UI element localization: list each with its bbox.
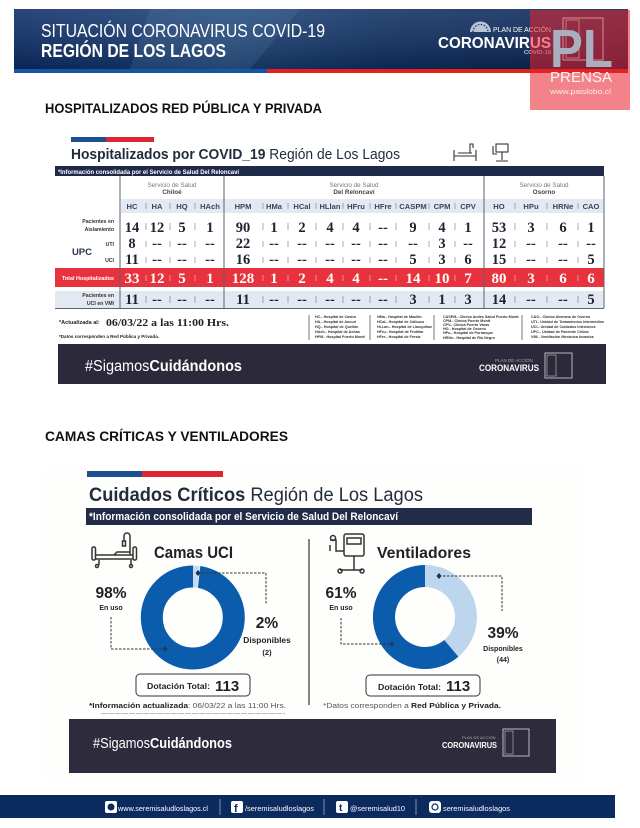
header title: SITUACIÓN CORONAVIRUS COVID-19 — [41, 20, 325, 41]
row: aislamiento: 1 — [270, 220, 278, 236]
box: dotación total ventiladores: 113 — [446, 678, 470, 695]
row: aislamiento: 14 — [125, 220, 139, 236]
label: 61% en uso: En uso — [329, 605, 353, 612]
row: total hospitalizados: 6 — [559, 271, 567, 287]
row: aislamiento: 12 — [150, 220, 164, 236]
panel: hospitalizados table: Pacientes en — [82, 293, 114, 299]
abbreviations legend: CPM.- Clínica Puerto Montt — [443, 319, 491, 323]
row: total hospitalizados: 1 — [206, 271, 214, 287]
watermark: PL prensa — [530, 10, 630, 110]
update note: 06/03/22 a las 11:00 Hrs. — [106, 317, 229, 329]
code row: HCal — [293, 202, 311, 211]
row: UCI: 16 — [236, 252, 250, 268]
watermark: PL prensa: PRENSA — [550, 69, 612, 86]
row: total hospitalizados: 1 — [270, 271, 278, 287]
row: UTI: -- — [408, 236, 418, 252]
row: total hospitalizados: 4 — [352, 271, 360, 287]
row: total hospitalizados: Total Hospitalizados — [62, 276, 114, 282]
service headings: Del Reloncaví — [333, 189, 375, 196]
row: aislamiento: 5 — [178, 220, 186, 236]
row: aislamiento: 90 — [236, 220, 250, 236]
row: aislamiento: 2 — [298, 220, 306, 236]
row: UCI: -- — [526, 252, 536, 268]
row: UTI: -- — [526, 236, 536, 252]
row: UTI: -- — [378, 236, 388, 252]
banner: sigamos cuidándonos: PLAN DE ACCIÓN — [495, 357, 533, 363]
panel: hospitalizados table: UCI en VMI — [87, 301, 115, 307]
table title: Hospitalizados por COVID_19 Región de Los Lagos — [71, 147, 400, 163]
row: pacientes en VMI: 11 — [125, 292, 139, 308]
row: pacientes en VMI: 5 — [587, 292, 595, 308]
panel: hospitalizados table — [55, 137, 606, 384]
row: pacientes en VMI: -- — [351, 292, 361, 308]
row: aislamiento: 1 — [206, 220, 214, 236]
abbreviations legend: VMI.- Ventilación Mecánica Invasiva — [531, 335, 594, 339]
logo: plan de acción coronavirus: PLAN DE ACCIÓN — [493, 25, 551, 34]
code row: HA — [152, 202, 163, 211]
panel: cuidados críticos — [45, 468, 585, 780]
panel title: Cuidados Críticos Región de Los Lagos — [89, 484, 423, 506]
footer: instagram — [429, 801, 510, 813]
code row: HQ — [176, 202, 188, 211]
row: pacientes en VMI: -- — [297, 292, 307, 308]
banner: sigamos cuidándonos 2 — [69, 719, 556, 773]
heading: camas UCI: Camas UCI — [154, 544, 233, 562]
info bar — [86, 508, 532, 525]
footer: facebook — [231, 801, 314, 815]
row: aislamiento: 4 — [438, 220, 446, 236]
info bar: *Información consolidada por el Servicio de Salud Del Reloncaví — [58, 170, 239, 176]
row: total hospitalizados: 128 — [232, 271, 254, 287]
abbreviations legend: HO.- Hospital de Osorno — [443, 327, 487, 331]
label: 39% disponibles: (44) — [497, 657, 509, 664]
label: 98% en uso: En uso — [99, 605, 123, 612]
row: total hospitalizados: 5 — [178, 271, 186, 287]
code row — [121, 199, 603, 213]
box: dotación total camas: Dotación Total: — [147, 681, 210, 691]
row: UCI: -- — [297, 252, 307, 268]
row labels: Aislamiento — [85, 227, 114, 233]
row: UTI: 3 — [438, 236, 446, 252]
abbreviations legend — [309, 315, 604, 340]
row: UCI: 11 — [125, 252, 139, 268]
label: 39% disponibles: 39% — [487, 625, 519, 642]
code row: HAch — [200, 202, 220, 211]
update note: *Actualizada al: — [59, 320, 100, 326]
row: UCI: -- — [205, 252, 215, 268]
row: UCI: 6 — [464, 252, 472, 268]
row: UTI: -- — [205, 236, 215, 252]
row: UTI: -- — [351, 236, 361, 252]
donut chart: ventiladores — [373, 565, 477, 669]
row: pacientes en VMI: 3 — [409, 292, 417, 308]
row: aislamiento: 6 — [559, 220, 567, 236]
service headings: Osorno — [533, 189, 555, 196]
logo: plan de acción coronavirus — [438, 22, 551, 56]
row: UTI: -- — [558, 236, 568, 252]
banner: sigamos cuidándonos 2: CORONAVIRUS — [442, 741, 498, 750]
service headings: Servicio de Salud — [519, 182, 569, 189]
row: pacientes en VMI: -- — [325, 292, 335, 308]
abbreviations legend: HRNe.- Hospital de Río Negro — [443, 336, 496, 340]
row: aislamiento: 1 — [464, 220, 472, 236]
row: UTI: -- — [152, 236, 162, 252]
abbreviations legend: UCI.- Unidad de Cuidados Intensivos — [531, 325, 596, 329]
row: aislamiento: 1 — [587, 220, 595, 236]
row: UTI: 8 — [128, 236, 136, 252]
row: UCI: -- — [177, 252, 187, 268]
note: actualización: *Información actualizada : 06/03/22 a las 11:00 Hrs. — [89, 703, 286, 710]
abbreviations legend: CAO.- Clínica Alemana de Osorno — [531, 315, 591, 319]
service headings: Chiloé — [162, 189, 182, 196]
logo: plan de acción coronavirus: CORONAVIRUS — [438, 35, 551, 52]
label: 98% en uso — [95, 585, 127, 612]
label: 61% en uso — [325, 585, 357, 612]
header title — [41, 20, 325, 61]
code row: HFru — [347, 202, 365, 211]
code row: HLlan — [319, 202, 341, 211]
row: pacientes en VMI: 11 — [236, 292, 250, 308]
row: total hospitalizados — [55, 268, 604, 287]
footer: twitter: @seremisalud10 — [350, 804, 405, 813]
row: aislamiento: 4 — [352, 220, 360, 236]
note: datos: *Datos corresponden a Red Pública y Privada. — [323, 703, 501, 710]
row: UTI: -- — [586, 236, 596, 252]
label: 39% disponibles — [483, 625, 523, 664]
row: total hospitalizados: 10 — [434, 271, 450, 287]
row labels: UCI — [105, 258, 115, 264]
row: aislamiento: 3 — [527, 220, 535, 236]
abbreviations legend: HFre.- Hospital de Fresia — [377, 335, 421, 339]
abbreviations legend: CASPM.- Clínica Andes Salud Puerto Montt — [443, 315, 519, 319]
row labels: Pacientes en — [82, 219, 114, 225]
code row: CPV — [460, 202, 477, 211]
code row: HPM — [235, 202, 251, 211]
code row: CPM — [434, 202, 450, 211]
footer: twitter — [336, 801, 405, 814]
abbreviations legend: UTI.- Unidad de Tratamientos Intermedios — [531, 320, 604, 324]
row: pacientes en VMI — [55, 291, 604, 308]
footer: twitter: t — [339, 803, 343, 814]
row: UCI: 3 — [438, 252, 446, 268]
row: UTI: -- — [177, 236, 187, 252]
row: UCI: 5 — [587, 252, 595, 268]
row: UTI: -- — [297, 236, 307, 252]
row: UTI: -- — [463, 236, 473, 252]
header banner — [14, 9, 628, 73]
footer bar — [0, 795, 615, 818]
row: total hospitalizados: 6 — [587, 271, 595, 287]
abbreviations legend: HAch.- Hospital de Achao — [315, 330, 361, 334]
abbreviations legend: HQ.- Hospital de Quellón — [315, 325, 359, 329]
box: dotación total ventiladores: Dotación Total: — [378, 682, 441, 692]
box: dotación total camas: 113 — [215, 678, 239, 695]
row: UCI: -- — [325, 252, 335, 268]
row: pacientes en VMI: -- — [152, 292, 162, 308]
row: pacientes en VMI: -- — [558, 292, 568, 308]
service headings — [147, 182, 569, 196]
code row: HFre — [374, 202, 392, 211]
header title: REGIÓN DE LOS LAGOS — [41, 40, 226, 61]
row: total hospitalizados: 80 — [492, 271, 506, 287]
row: UCI: 5 — [409, 252, 417, 268]
row: UTI: -- — [269, 236, 279, 252]
label: 98% en uso: 98% — [95, 585, 127, 602]
footer: web: www.seremisaludloslagos.cl — [117, 804, 208, 813]
service headings: Servicio de Salud — [147, 182, 197, 189]
row: pacientes en VMI: -- — [526, 292, 536, 308]
banner: sigamos cuidándonos 2: #SigamosCuidándonos — [93, 736, 232, 752]
row: pacientes en VMI: -- — [269, 292, 279, 308]
update note: *Datos corresponden a Red Pública y Privada. — [59, 334, 159, 339]
abbreviations legend: HA.- Hospital de Ancud — [315, 320, 357, 324]
abbreviations legend: HFru.- Hospital de Frutillar — [377, 330, 424, 334]
watermark: PL prensa: www.paislobo.cl — [549, 87, 611, 96]
row: UTI: 22 — [236, 236, 250, 252]
row labels — [72, 219, 115, 264]
label: 2% disponibles: Disponibles — [243, 635, 291, 645]
banner: sigamos cuidándonos: #SigamosCuidándonos — [85, 358, 242, 375]
abbreviations legend: HC.- Hospital de Castro — [315, 315, 357, 319]
row: UCI: -- — [558, 252, 568, 268]
leader lines camas — [111, 573, 266, 649]
row: UTI: 12 — [492, 236, 506, 252]
row: total hospitalizados: 4 — [326, 271, 334, 287]
info bar — [55, 166, 604, 176]
row: aislamiento: 53 — [492, 220, 506, 236]
abbreviations legend: HLLan.- Hospital de Llanquihue — [377, 325, 432, 329]
box: dotación total camas — [136, 674, 250, 696]
abbreviations legend: HPM.- Hospital Puerto Montt — [315, 335, 366, 339]
abbreviations legend: UPC.- Unidad de Paciente Crítica — [531, 330, 590, 334]
row: pacientes en VMI: -- — [177, 292, 187, 308]
label: 2% disponibles — [243, 615, 291, 657]
icon: ventilator — [330, 534, 364, 573]
row: aislamiento: 4 — [326, 220, 334, 236]
banner: sigamos cuidándonos 2: PLAN DE ACCIÓN — [462, 735, 496, 740]
heading: ventiladores: Ventiladores — [377, 545, 471, 562]
info bar: *Información consolidada por el Servicio de Salud Del Reloncaví — [89, 511, 399, 523]
label: 61% en uso: 61% — [325, 585, 357, 602]
footer: facebook: f — [234, 803, 238, 815]
row: total hospitalizados: 14 — [406, 271, 421, 287]
row: pacientes en VMI: 14 — [492, 292, 506, 308]
code row: CAO — [583, 202, 600, 211]
logo: plan de acción coronavirus: COVID-19 — [524, 50, 551, 56]
row: UCI: -- — [378, 252, 388, 268]
row: pacientes en VMI: -- — [378, 292, 388, 308]
label: 2% disponibles: 2% — [256, 615, 278, 632]
row: UCI: 15 — [492, 252, 506, 268]
row: total hospitalizados: 12 — [150, 271, 164, 287]
update note — [59, 317, 229, 339]
leader lines ventiladores — [341, 576, 502, 644]
row: total hospitalizados: -- — [378, 271, 388, 287]
donut chart: camas UCI — [152, 566, 234, 658]
icon: ventilator small — [493, 144, 508, 161]
row: total hospitalizados: 3 — [527, 271, 535, 287]
row: total hospitalizados: 7 — [464, 271, 472, 287]
abbreviations legend: HMa.- Hospital de Maullín — [377, 315, 422, 319]
row: UTI — [128, 236, 596, 252]
abbreviations legend: HCal.- Hospital de Calbuco — [377, 320, 425, 324]
row labels: UTI — [106, 242, 115, 248]
section heading: hospitalizados: HOSPITALIZADOS RED PÚBLICA Y PRIVADA — [45, 101, 322, 116]
code row: HC — [127, 202, 138, 211]
box: dotación total ventiladores — [366, 675, 480, 696]
footer: web — [105, 801, 208, 813]
row: pacientes en VMI: -- — [205, 292, 215, 308]
label: 2% disponibles: (2) — [262, 648, 272, 657]
watermark: PL prensa: PL — [550, 19, 613, 79]
banner: sigamos cuidándonos: CORONAVIRUS — [479, 363, 539, 373]
row: aislamiento — [125, 220, 595, 236]
row: UCI — [125, 252, 595, 268]
row: total hospitalizados: 33 — [124, 271, 140, 287]
icon: bed small — [454, 144, 476, 161]
row: UCI: -- — [152, 252, 162, 268]
code row: HRNe — [553, 202, 573, 211]
banner: sigamos cuidándonos — [58, 344, 606, 384]
row: pacientes en VMI: 1 — [438, 292, 446, 308]
row: total hospitalizados: 2 — [298, 271, 306, 287]
code row: HO — [493, 202, 505, 211]
service headings: Servicio de Salud — [329, 182, 379, 189]
row labels: UPC — [72, 247, 92, 258]
footer: instagram: seremisaludloslagos — [443, 804, 510, 813]
label: 39% disponibles: Disponibles — [483, 646, 523, 653]
divider — [308, 539, 310, 705]
abbreviations legend: CPV.- Clínica Puerto Varas — [443, 323, 489, 327]
row: aislamiento: 9 — [409, 220, 417, 236]
row: UTI: -- — [325, 236, 335, 252]
row: pacientes en VMI: 3 — [464, 292, 472, 308]
code row: CASPM — [399, 202, 427, 211]
row: UCI: -- — [351, 252, 361, 268]
section heading: camas críticas: CAMAS CRÍTICAS Y VENTILADORES — [45, 429, 288, 444]
abbreviations legend: HPu.- Hospital de Purranque — [443, 331, 493, 335]
footer: facebook: /seremisaludloslagos — [245, 804, 314, 813]
code row: HMa — [266, 202, 283, 211]
row: aislamiento: -- — [378, 220, 388, 236]
row: UCI: -- — [269, 252, 279, 268]
code row: HPu — [523, 202, 539, 211]
icon: hospital bed — [92, 533, 136, 568]
